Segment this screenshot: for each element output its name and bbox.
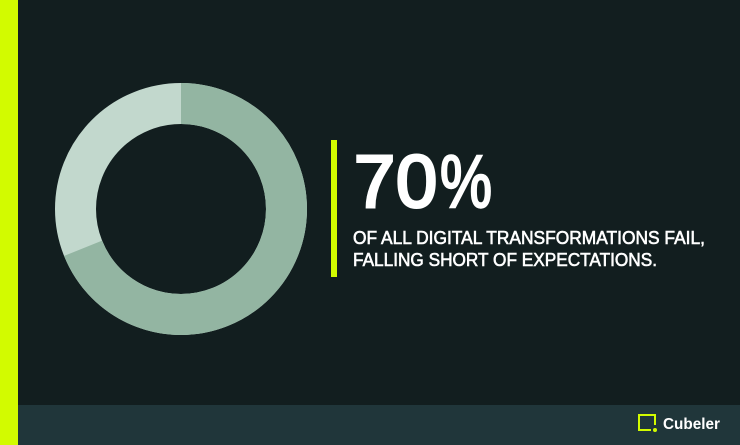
big statistic (354, 140, 492, 223)
footer band (18, 405, 740, 445)
left accent bar (0, 0, 18, 445)
donut chart: 70 percent (76, 104, 286, 314)
statement line 2: FALLING SHORT OF EXPECTATIONS. (353, 250, 657, 270)
callout text (353, 140, 705, 270)
vertical callout rule (331, 140, 337, 277)
logo wordmark: Cubeler (663, 416, 720, 433)
big statistic: 0 (396, 140, 437, 223)
big statistic: % (440, 140, 492, 223)
logo: Cubeler (639, 415, 720, 433)
big statistic: 7 (354, 140, 395, 223)
logo icon (639, 415, 657, 432)
statement line 1: OF ALL DIGITAL TRANSFORMATIONS FAIL, (353, 228, 705, 248)
